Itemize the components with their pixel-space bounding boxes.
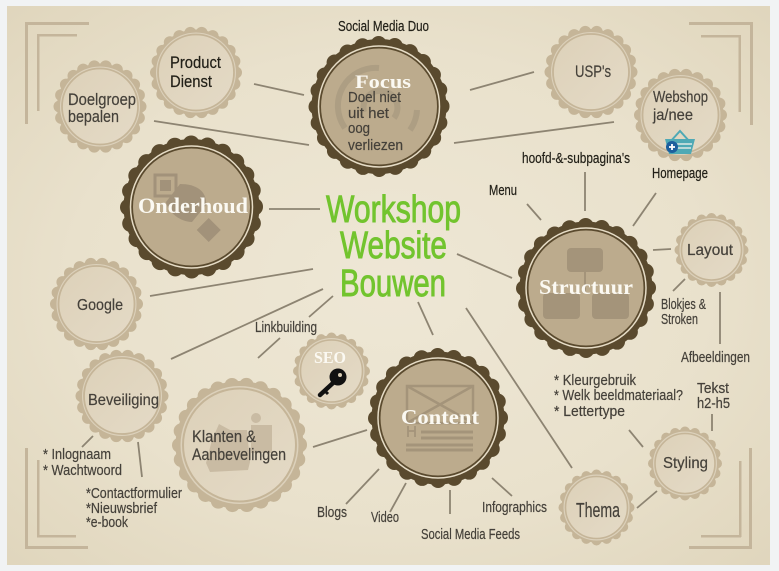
list: login: * Inlognaam: [43, 446, 111, 463]
badge: Layout: [678, 216, 746, 284]
label: ja/nee: [652, 107, 693, 124]
focus heading: Focus: [355, 72, 411, 93]
title: Workshop: [326, 189, 461, 231]
list: login: [43, 446, 122, 479]
focus text: [348, 89, 403, 154]
label: Aanbevelingen: [192, 445, 286, 464]
label: Infographics: Infographics: [482, 499, 547, 516]
onderhoud heading: Onderhoud: [138, 193, 248, 218]
label: Blogs: Blogs: [317, 504, 347, 521]
icon: blocks: [543, 248, 629, 319]
icon: basket: [665, 131, 695, 154]
icon: thumbs up: [206, 413, 272, 472]
label: Menu: Menu: [489, 182, 517, 199]
content heading: Content: [401, 405, 479, 429]
label: Beveiliging: [88, 392, 159, 409]
label: Blokjes & Stroken: Stroken: [661, 311, 698, 328]
label: Social Media Duo: Social Media Duo: [338, 18, 429, 35]
badge: Structuur: [520, 222, 652, 354]
list: contact: *Nieuwsbrief: [86, 500, 158, 517]
label: [192, 427, 286, 464]
title: [326, 189, 461, 305]
list: contact: [86, 485, 182, 531]
label: Afbeeldingen: Afbeeldingen: [681, 349, 750, 366]
corner bracket: bottom right: [689, 448, 752, 549]
focus text: uit het: [348, 105, 390, 122]
badge: Focus: [312, 39, 446, 174]
focus text: Doel niet: [348, 89, 402, 106]
structuur heading: Structuur: [539, 275, 633, 299]
label: Video: Video: [371, 509, 399, 526]
title: Bouwen: [340, 263, 446, 305]
label: Tekst h2-h5: h2-h5: [697, 395, 730, 412]
list: contact: *e-book: [86, 514, 128, 531]
label: Thema: [576, 500, 621, 522]
label: [68, 90, 136, 126]
list: styling items: [554, 372, 683, 420]
icon: tool: [155, 175, 221, 242]
label: Styling: [663, 455, 708, 472]
label: Google: [77, 297, 123, 314]
label: Layout: [687, 242, 734, 259]
label: Webshop: [653, 89, 708, 106]
badge: Thema: [562, 472, 632, 542]
label: Linkbuilding: Linkbuilding: [255, 319, 317, 336]
focus text: oog: [348, 120, 370, 137]
label: Blokjes & Stroken: [661, 296, 706, 328]
corner bracket: bottom left: [25, 448, 88, 549]
label: Product: [170, 53, 221, 72]
list: styling items: * Lettertype: [554, 403, 625, 420]
label: Social Media Feeds: Social Media Feeds: [421, 526, 520, 543]
list: login: * Wachtwoord: [43, 462, 122, 479]
icon: key: [320, 368, 346, 395]
label: Dienst: [170, 72, 212, 91]
badge: Onderhoud: [124, 139, 260, 275]
title: Website: [340, 225, 447, 267]
badge: Styling: [651, 430, 719, 498]
list: styling items: * Kleurgebruik: [554, 372, 636, 389]
badge: Product Dienst: [153, 30, 239, 116]
corner bracket: top right: [689, 22, 753, 125]
label: USP's: [575, 62, 611, 81]
label: Doelgroep: [68, 90, 136, 109]
label: Blokjes & Stroken: Blokjes &: [661, 296, 706, 313]
badge: SEO: [296, 336, 367, 406]
label: Tekst h2-h5: [697, 380, 730, 412]
list: styling items: * Welk beeldmateriaal?: [554, 387, 683, 404]
connector lines: [82, 72, 720, 514]
icon: wireframe: [406, 386, 473, 450]
corner bracket: top left: [25, 22, 89, 124]
badge: Doelgroep bepalen: [57, 64, 143, 150]
focus text: verliezen: [348, 137, 403, 154]
label: Tekst h2-h5: Tekst: [697, 380, 730, 397]
label: Klanten &: [192, 427, 257, 446]
label: Homepage: Homepage: [652, 165, 708, 182]
label: SEO: [314, 348, 346, 367]
badge: Content: [372, 352, 504, 484]
badge: Google: [54, 261, 140, 347]
label: bepalen: [68, 107, 119, 126]
label: [652, 89, 708, 124]
label: hoofd- & subpagina's: hoofd-&-subpagina's: [522, 150, 630, 167]
badge: Beveiliging: [79, 353, 165, 439]
badge: Klanten & Aanbevelingen: [176, 381, 304, 509]
icon: spiral: [338, 68, 417, 130]
label: [170, 53, 221, 91]
badge: Webshop: [638, 72, 724, 158]
badge: USP's: [548, 29, 634, 115]
list: contact: *Contactformulier: [86, 485, 182, 502]
